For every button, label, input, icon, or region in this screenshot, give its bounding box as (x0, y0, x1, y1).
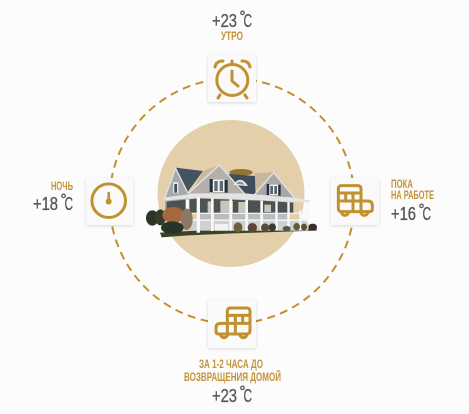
label: while at work (391, 179, 434, 202)
center gable sunlit roof (194, 165, 218, 187)
label: 1-2 hours before returning home (184, 359, 281, 384)
porch doors and windows (208, 201, 271, 213)
card: at work bus (331, 178, 379, 225)
label: while at work: ПОКА (391, 179, 413, 191)
label: 1-2 hours before returning home: ЗА 1-2 ЧАСА ДО (199, 359, 263, 371)
center gable wall (188, 165, 246, 195)
upper windows (173, 179, 281, 196)
label: at work temperature: ° (418, 201, 424, 218)
label: night: НОЧЬ (51, 181, 73, 193)
label: morning temperature: +23 (212, 10, 237, 31)
porch roof (164, 193, 310, 202)
label: morning: УТРО (221, 31, 243, 43)
card: morning clock (208, 55, 256, 102)
foundation (192, 221, 308, 231)
porch columns (186, 197, 309, 233)
label: return temperature: C (244, 385, 252, 406)
left wing wall (165, 168, 188, 210)
dashed cycle ring (110, 78, 354, 324)
label: night temperature: +18 (33, 193, 58, 214)
icon: bus (338, 186, 372, 215)
label: return temperature: ° (240, 383, 246, 400)
lawn strip (160, 229, 317, 237)
icon: thermostat dial (92, 184, 125, 218)
label: 1-2 hours before returning home: ВОЗВРАЩЕНИЯ ДОМОЙ (184, 371, 281, 384)
house illustration (146, 165, 317, 237)
shrubs (146, 207, 317, 234)
label: at work temperature: C (422, 203, 431, 224)
label: return temperature: +23 (212, 385, 237, 406)
porch railing (192, 213, 308, 221)
right gable wall (253, 173, 294, 197)
left roof (176, 168, 203, 192)
icon: mirrored bus (216, 308, 250, 338)
label: at work temperature: +16 (391, 203, 416, 224)
card: returning home bus (208, 300, 256, 348)
beige circle behind house (158, 120, 304, 267)
porch interior (167, 198, 293, 214)
label: night temperature: C (64, 193, 73, 214)
card: night thermostat (86, 178, 133, 225)
label: morning temperature: C (244, 10, 252, 31)
tan roof (254, 172, 274, 190)
label: morning temperature: ° (240, 8, 246, 25)
label: while at work: НА РАБОТЕ (391, 190, 434, 202)
icon: alarm clock (215, 61, 250, 98)
gable trim (165, 165, 294, 197)
right dark roof (228, 174, 256, 195)
label: night temperature: ° (60, 191, 66, 208)
tree behind roof (229, 169, 253, 176)
dormer window (233, 180, 248, 186)
